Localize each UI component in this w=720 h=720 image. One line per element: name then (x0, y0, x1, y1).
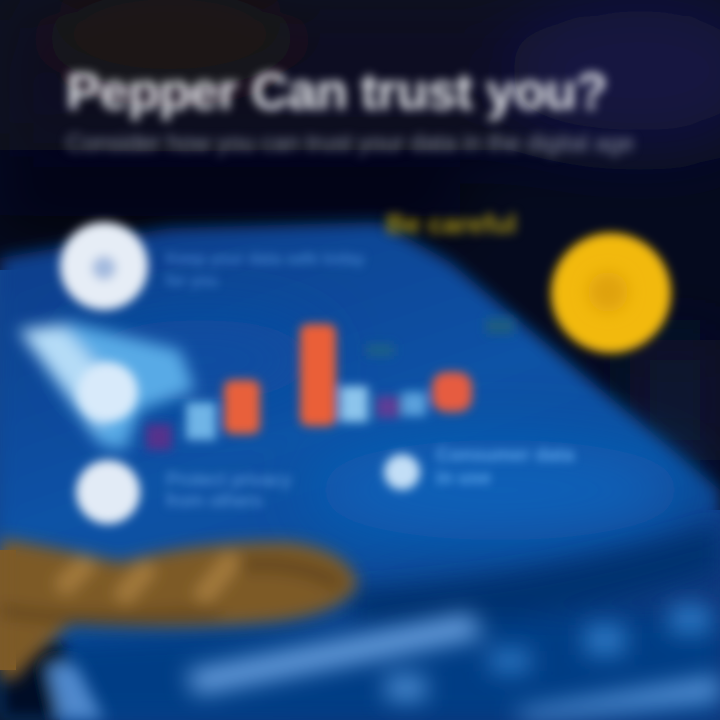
icon: circle middle (78, 362, 138, 422)
text block: lower circle: from others (166, 491, 262, 512)
icon: gold coin (551, 233, 671, 353)
text block: lower circle (164, 470, 292, 512)
text block: top circle (164, 249, 365, 290)
title: Pepper Can trust you? (66, 63, 607, 121)
subtitle: Consider how you can trust your data in the digital age (66, 130, 634, 157)
panel edge underlay (0, 270, 720, 720)
text block: lower right: Consumer data (436, 445, 574, 466)
dark header backdrop (0, 0, 720, 460)
lighter band in panel (80, 320, 690, 540)
bottom strip on left (0, 640, 104, 720)
text block: lower circle: Protect privacy (166, 470, 292, 491)
bar chart (146, 318, 514, 450)
text block: lower right: in use (436, 468, 491, 489)
hand (0, 538, 358, 680)
bottom text bands (186, 605, 720, 720)
text block: lower right (434, 444, 577, 489)
blue tilted panel (0, 222, 720, 720)
icon: dot lower right (384, 454, 420, 490)
text block: top circle: Keep your data safe today (166, 249, 364, 268)
funnel graphic (18, 322, 195, 450)
lower dark panel edge (60, 525, 720, 720)
icon: circle top (60, 222, 148, 310)
icon: circle lower (76, 460, 140, 524)
gold label: Be careful (386, 209, 517, 239)
text block: top circle: for you (166, 271, 218, 290)
